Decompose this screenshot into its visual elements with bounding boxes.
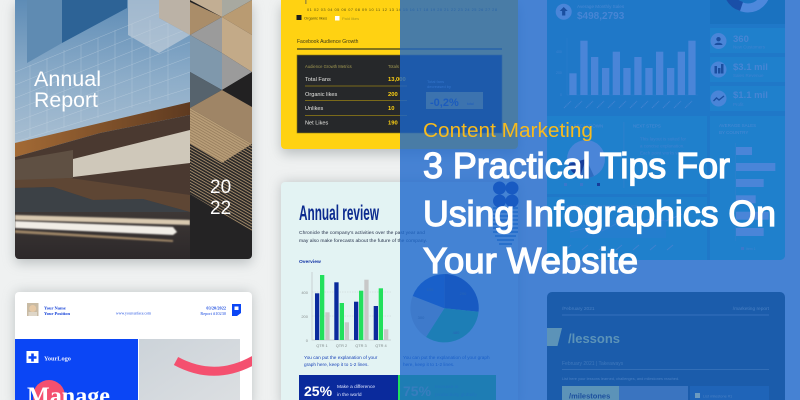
decorative stripes	[493, 208, 518, 244]
stat box 75%: productivity globally	[435, 392, 477, 398]
sales bar chart: 0	[560, 93, 562, 97]
cover year: 22	[210, 198, 231, 219]
stat: new customers: 360	[733, 34, 749, 45]
milestones box	[562, 386, 688, 400]
stat: sales revenue	[710, 62, 768, 78]
metrics table: Net Likes	[305, 120, 329, 126]
grouped bar chart: QTR 1	[316, 343, 328, 348]
metrics table: 190	[388, 120, 398, 126]
callout: total fans decreased: -0,2%	[430, 97, 459, 109]
stat: profit	[710, 90, 768, 106]
stat: sales revenue: $3.1 mil	[733, 62, 768, 73]
pink arc	[176, 360, 254, 371]
panel: average sales by country	[719, 124, 785, 260]
pie chart: 300	[418, 315, 425, 320]
callout: total fans decreased: total	[467, 102, 474, 106]
logo wordmark: YourLogo	[44, 356, 71, 362]
panel: average sales by country: Item 1	[746, 247, 756, 251]
metrics table: 13,000	[388, 77, 406, 83]
review description: Chronicle the company's activities over the past year and	[299, 230, 425, 236]
metrics table	[297, 55, 502, 133]
grouped bar chart: QTR 2	[336, 343, 347, 348]
cover year	[210, 177, 231, 219]
stat: sales revenue: Sales Revenue	[733, 73, 764, 78]
grouped bar chart: QTR 4	[375, 343, 388, 348]
metrics table: Audience Growth Metrics	[305, 64, 352, 69]
card: annual report cover	[15, 0, 252, 263]
monthly sales stat: $498,2793	[577, 11, 625, 22]
legend: Organic likes	[304, 16, 327, 20]
portrait photo	[27, 303, 38, 316]
panel: next steps: Each point works well	[640, 150, 683, 156]
review description: may also make forecasts about the future of the company.	[299, 238, 427, 244]
metrics table: 10	[388, 106, 394, 112]
stat box 75%	[400, 375, 496, 400]
lessons heading: /lessons	[568, 331, 620, 346]
logo mark	[232, 304, 241, 316]
pie chart	[410, 274, 479, 342]
stat box 25%: Make a difference	[337, 384, 375, 390]
panel: next steps: a concise explanation.	[640, 144, 685, 148]
date and report number: Report #10230	[200, 311, 226, 316]
sky photo	[139, 339, 240, 400]
panel: next steps	[624, 122, 687, 188]
logo badge	[26, 351, 38, 363]
chart axis and day labels: 01 02 03 04 05 06 07 08 09 10 11 12 13 14 15 16 17 18 19 20 21 22 23 24 25 26 27 28	[307, 7, 497, 12]
metrics table: Organic likes	[305, 92, 338, 98]
stat: new customers	[710, 33, 765, 49]
donut panel	[726, 0, 768, 12]
author: Your Name	[44, 306, 66, 310]
hexagon mosaic panel	[190, 0, 252, 262]
metrics table: Unlikes	[305, 106, 324, 112]
website: www.yoursurface.com	[116, 312, 151, 316]
card: annual review	[281, 182, 518, 400]
chart explanations: You can put the explanation of your	[304, 355, 378, 360]
date and report number	[200, 306, 226, 316]
sales bar chart: 400	[556, 50, 562, 54]
report header	[562, 306, 769, 311]
grouped bar chart: 400	[301, 290, 309, 295]
pie chart: 290	[460, 291, 467, 296]
grouped bar chart	[301, 272, 391, 348]
callout: total fans decreased	[426, 79, 483, 109]
report header: /marketing report	[733, 306, 770, 312]
milestone list item: List milestone #1	[703, 394, 732, 398]
takeaways line: February 2021 | Takeaways	[562, 361, 624, 367]
panel: average sales by country: BY COUNTRY	[719, 130, 748, 135]
author	[44, 306, 70, 315]
sales bar chart	[556, 38, 698, 108]
cover year: 20	[210, 177, 231, 198]
section heading: Facebook Audience Growth	[297, 39, 359, 45]
card: yellow social media report	[281, 0, 518, 154]
cover subtitle: Report	[34, 88, 98, 112]
metrics table: Total Fans	[305, 77, 331, 83]
headline: Using Infographics On	[423, 193, 776, 234]
report header: /February 2021	[562, 306, 595, 312]
milestone list item	[690, 386, 769, 400]
accent tab	[547, 328, 562, 346]
grouped bar chart: QTR 3	[355, 343, 367, 348]
eyebrow: content marketing: Content Marketing	[423, 120, 593, 142]
stat box 25%: 25%	[304, 383, 333, 399]
stat box 25%	[299, 375, 400, 400]
grouped bar chart: 0	[306, 338, 309, 343]
card: sales dashboard	[547, 0, 785, 260]
sales bar chart: 200	[556, 71, 562, 75]
author: Your Position	[44, 311, 71, 316]
translucent hexagon overlay	[128, 0, 190, 53]
panel: next steps: This layout is suited for	[640, 136, 687, 142]
stat: profit: $1.1 mil	[733, 90, 768, 101]
panel: next steps: NEXT STEPS	[633, 124, 661, 128]
panel: sales breakdown	[558, 124, 605, 186]
metrics table: 200	[388, 92, 398, 98]
decorative circles	[493, 182, 518, 208]
chart explanations: You can put the explanation of your graph	[403, 355, 490, 360]
card: white report cover	[15, 292, 254, 400]
panel: average sales by country: AVERAGE SALES	[719, 123, 756, 128]
stat: new customers: New Customers	[733, 44, 766, 50]
blue overlay panel	[400, 0, 800, 400]
monthly sales stat	[556, 4, 625, 22]
headline	[423, 145, 776, 281]
panel: sales breakdown: SALES BREAKDOWN	[558, 124, 603, 128]
review title: Annual review	[299, 201, 379, 225]
headline: 3 Practical Tips For	[423, 145, 730, 186]
stat: profit: Profit	[733, 102, 744, 107]
panel: sales target: SALES TARGET AND PERFORMANCE	[558, 204, 638, 209]
lessons description: List here your lessons learned, challenges, and milestones reached.	[562, 376, 679, 381]
cover title: Annual	[34, 67, 101, 91]
card: lessons report	[547, 292, 785, 400]
legend	[296, 15, 359, 21]
stat box 75%: Increase in	[435, 384, 459, 390]
chart explanations: here, keep it to 1-2 lines.	[403, 362, 454, 367]
blue title panel	[15, 339, 138, 400]
overview label: Overview	[299, 259, 321, 265]
monthly sales stat: Average Monthly Sales	[577, 4, 625, 9]
date and report number: 03/20/2022	[206, 306, 226, 310]
legend: Paid likes	[342, 16, 359, 21]
chart explanations	[304, 355, 490, 367]
building photo	[15, 0, 190, 262]
stat box 75%: 75%	[403, 383, 432, 399]
pie chart: 190	[427, 287, 434, 292]
metrics table: Totals	[388, 64, 399, 69]
stat box 25%: in the world	[337, 392, 362, 398]
pink circle	[33, 380, 65, 400]
grouped bar chart: 200	[301, 314, 309, 319]
callout: total fans decreased: decreased by	[427, 84, 451, 89]
review description	[299, 230, 427, 244]
panel: sales target	[548, 205, 682, 260]
headline: Your Website	[423, 240, 638, 281]
pie chart: 480	[453, 330, 460, 335]
chart explanations: graph here, keep it to 1-2 lines.	[304, 362, 369, 367]
callout: total fans decreased: Total fans	[427, 79, 444, 84]
